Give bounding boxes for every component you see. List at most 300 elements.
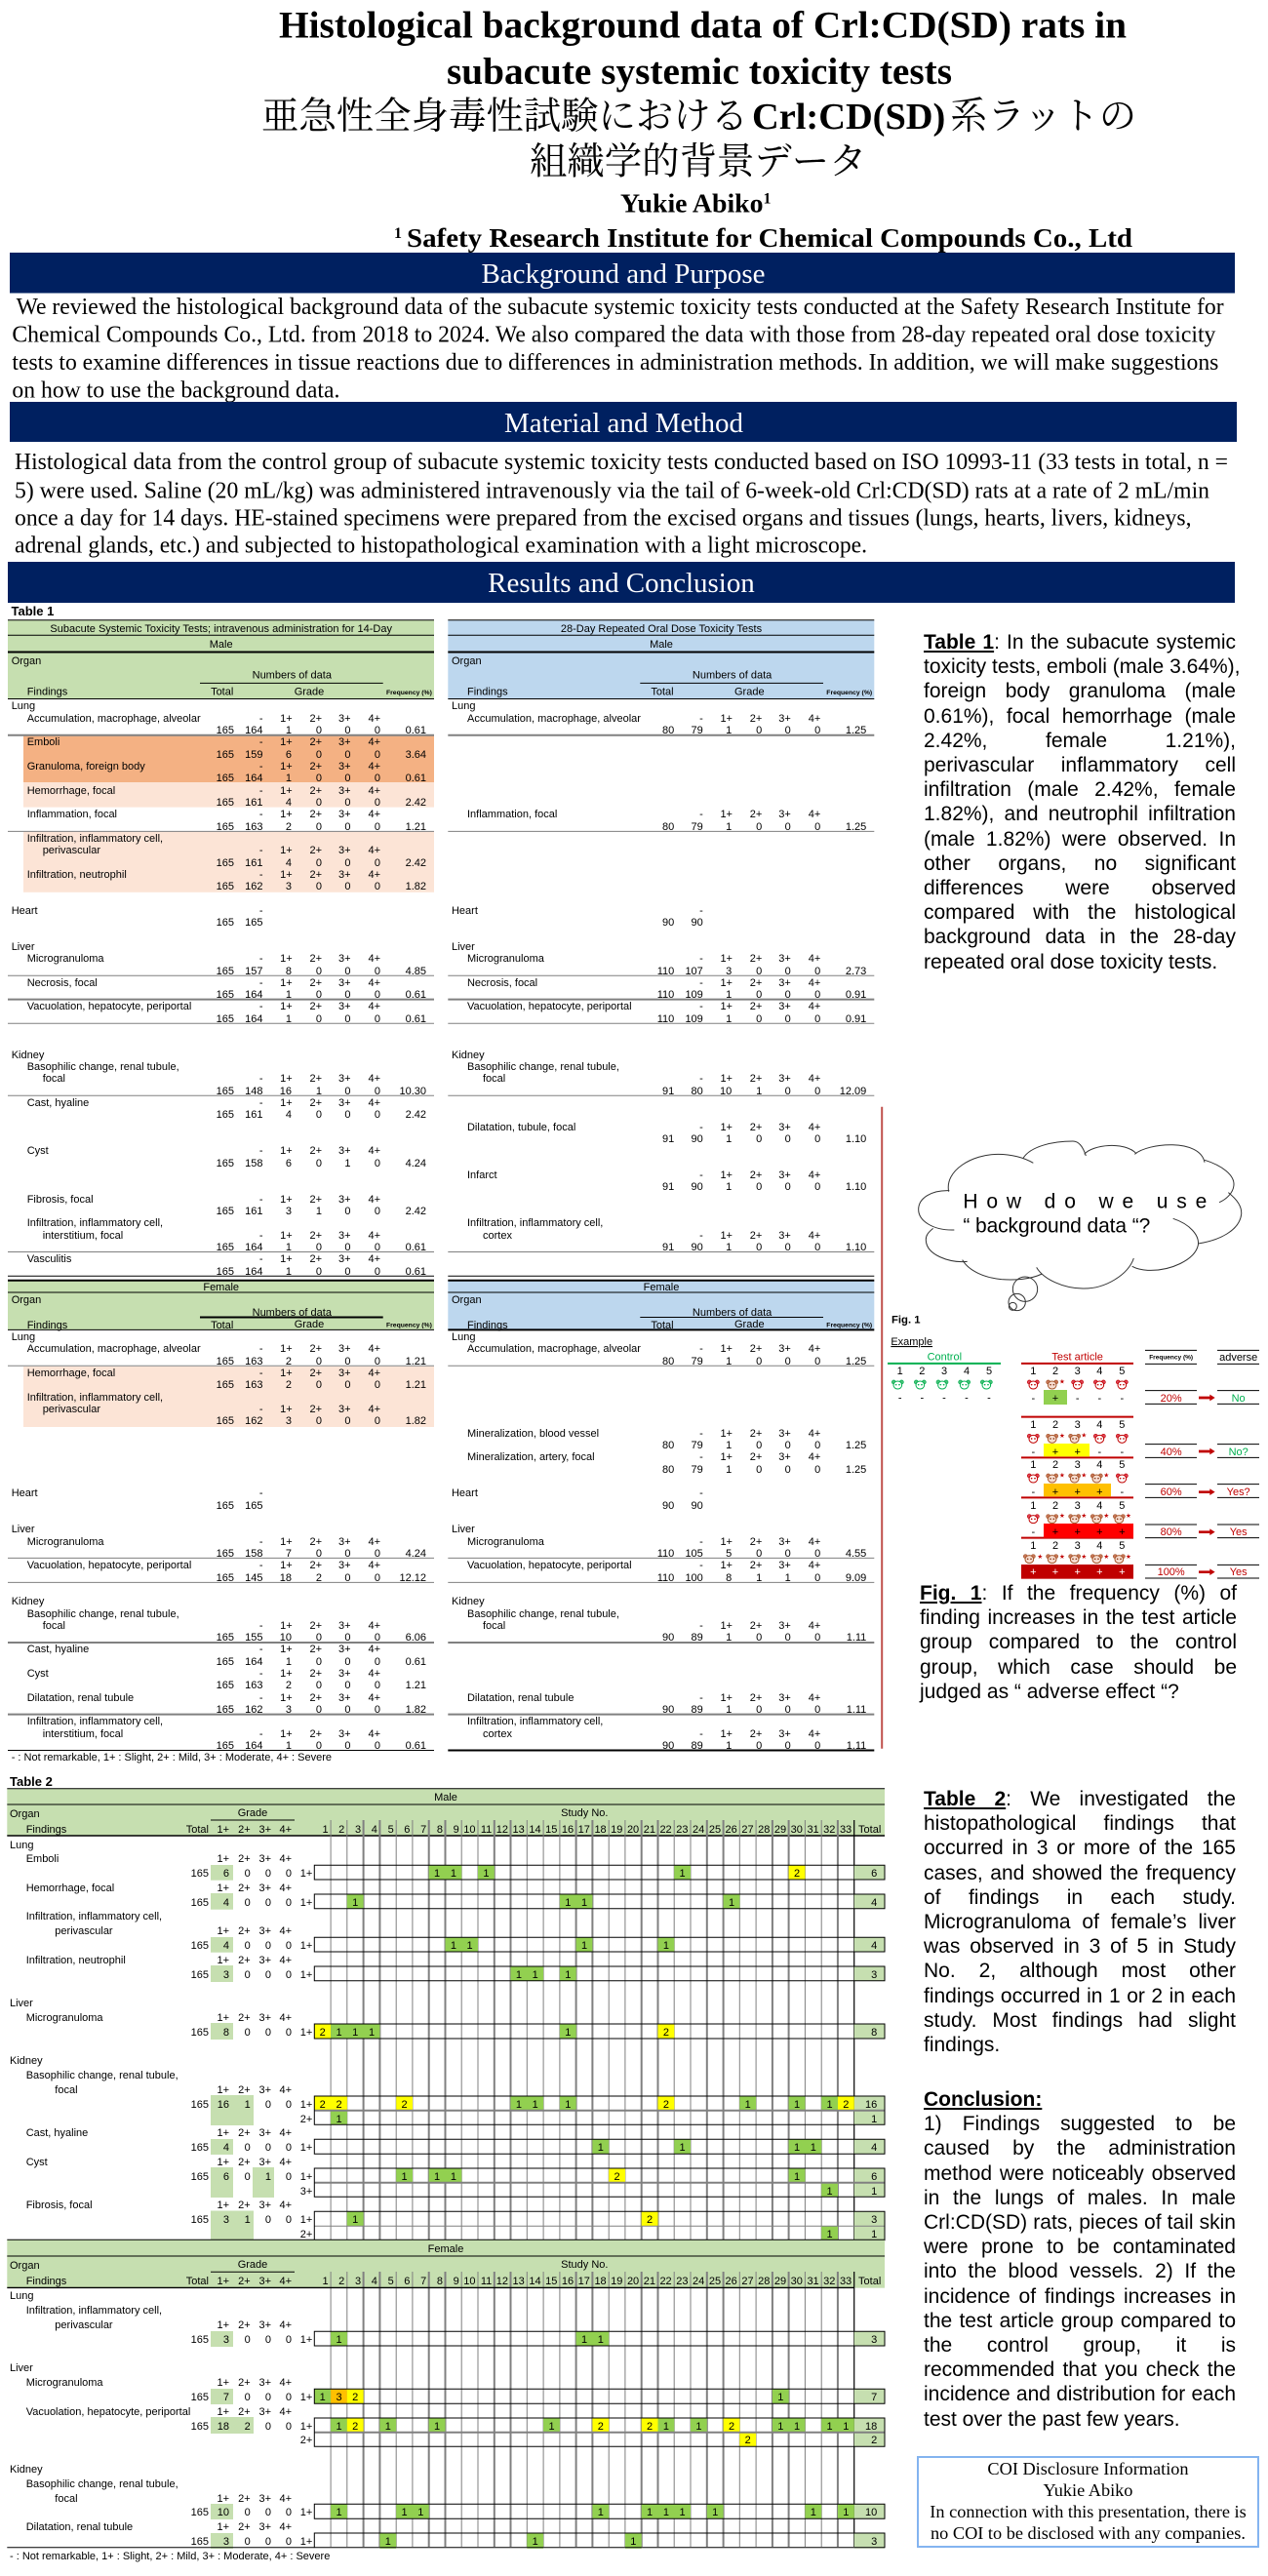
organ: liver rows: 0.61	[406, 1013, 426, 1025]
organ: kidney rows: 0	[375, 1632, 380, 1644]
title: Japanese: Crl:CD(SD)	[752, 97, 945, 138]
test article group: +	[1052, 1526, 1058, 1538]
organ: lung rows: Mineralization, blood vessel	[467, 1428, 599, 1440]
organ: kidney rows: -	[699, 1169, 703, 1181]
row: Basophilic change: 1	[336, 2114, 342, 2125]
highlight band: female lung findings	[23, 1367, 434, 1427]
header: female: 8	[437, 2276, 443, 2287]
organ: kidney rows: 4+	[368, 1097, 380, 1109]
header: female subacute	[8, 1281, 434, 1331]
test article group: 5	[1119, 1366, 1125, 1377]
organ: kidney rows: 1+	[720, 1620, 733, 1632]
organ: kidney rows: 4+	[809, 1692, 820, 1704]
label: Table 2: Table 2	[10, 1774, 53, 1789]
organ: lung rows: 0	[316, 1379, 322, 1391]
organ: kidney rows: 165	[217, 1158, 234, 1169]
header: male subacute: Organ	[12, 655, 41, 667]
organ: kidney rows	[452, 1050, 866, 1253]
row: female Basophilic change: 1	[843, 2507, 849, 2518]
organ: kidney rows: 0	[316, 1158, 322, 1169]
organ: liver rows: 0.91	[846, 989, 866, 1001]
organ: kidney rows: 4+	[809, 1728, 820, 1740]
row: Infiltration, perivascular: 1+	[217, 1925, 229, 1937]
organ: liver rows: Vacuolation, hepatocyte, periportal	[467, 1001, 632, 1012]
organ: liver rows	[12, 1524, 426, 1584]
text: method paragraph: once a day for 14 days. HE-stained specimens were prepared from the excised organs and tissues (lungs, hearts, livers, kidneys,	[15, 505, 1192, 531]
organ: kidney rows: 164	[245, 1242, 263, 1253]
row: Hemorrhage, focal: 0	[245, 1897, 251, 1909]
row: female Vacuolation: 2+	[300, 2435, 312, 2446]
organ: lung rows: 2+	[750, 1343, 762, 1355]
row: female Infiltration, perivascular	[26, 2305, 885, 2347]
header: male 28-day: Organ	[452, 655, 482, 667]
organ: kidney rows: 0	[316, 1704, 322, 1716]
organ: heart row	[452, 905, 703, 929]
row: female Basophilic change: 1	[417, 2507, 423, 2518]
organ: lung rows: 0	[375, 725, 380, 736]
organ: kidney rows: 0	[375, 1656, 380, 1668]
row: female Vacuolation: 1	[827, 2421, 833, 2433]
test article group: 4	[1096, 1366, 1102, 1377]
organ: kidney rows: 162	[245, 1704, 263, 1716]
organ: liver rows: 0	[375, 1013, 380, 1025]
header: female subacute: Frequency (%)	[386, 1323, 432, 1328]
row: Hemorrhage, focal: 1	[565, 1897, 571, 1909]
organ: kidney rows: 1	[316, 1086, 322, 1097]
organ: lung rows: 0	[375, 773, 380, 784]
organ: liver rows: Necrosis, focal	[467, 977, 537, 989]
organ: kidney rows: 1.10	[846, 1133, 866, 1145]
text: Conclusion: incidence and distribution for each	[924, 2383, 1236, 2405]
organ: liver rows: 2+	[309, 977, 322, 989]
organ: lung rows: 4+	[368, 713, 380, 725]
organ: liver rows: 0	[814, 1548, 820, 1560]
organ: liver rows: 165	[217, 966, 234, 977]
row: Microgranuloma male: 2	[663, 2027, 669, 2039]
row: Fibrosis, focal: 1+	[217, 2200, 229, 2211]
header: female: 7	[420, 2276, 426, 2287]
row: Basophilic change: 1	[565, 2099, 571, 2111]
row: Cast, hyaline: 0	[286, 2142, 292, 2154]
text: Conclusion: were prone to be contaminated	[924, 2236, 1236, 2258]
organ: lung rows: 1.25	[846, 1440, 866, 1451]
adverse column: Yes	[1230, 1526, 1248, 1538]
row: Basophilic change: 0	[265, 2099, 271, 2111]
header: female: 5	[388, 2276, 394, 2287]
header: female: 1+	[217, 2276, 229, 2287]
organ: kidney rows: 89	[692, 1632, 703, 1644]
organ: lung rows: 0.61	[406, 773, 426, 784]
row: Infiltration, neutrophil: 3+	[258, 1955, 271, 1966]
test article group: -	[1120, 1447, 1124, 1458]
row: female Microgranuloma: 0	[245, 2392, 251, 2403]
organ: lung rows: 165	[217, 821, 234, 833]
organ: liver rows: 0	[814, 1013, 820, 1025]
organ: kidney rows: focal	[483, 1073, 505, 1085]
header: male: 3+	[258, 1824, 271, 1836]
arrows	[1199, 1395, 1215, 1575]
organ: kidney rows: 1+	[720, 1230, 733, 1242]
test article group: ★	[1103, 1512, 1109, 1520]
header: male: 3	[355, 1824, 361, 1836]
text: Table 1 commentary: 0.61%), focal hemorrhage (male	[924, 705, 1236, 728]
row: Hemorrhage, focal	[26, 1882, 885, 1910]
header: male: Study No.	[561, 1807, 608, 1819]
row: Fibrosis, focal: 1+	[300, 2214, 312, 2226]
organ: liver rows: 110	[657, 1572, 674, 1584]
row: female Dilatation: 4+	[279, 2521, 292, 2533]
organ: liver rows: 0	[344, 1013, 351, 1025]
test article group: 2	[1052, 1500, 1058, 1512]
organ: liver rows: 0	[375, 1572, 380, 1584]
organ: kidney rows: 1+	[280, 1194, 293, 1206]
organ: kidney rows: 1+	[720, 1122, 733, 1133]
organ: heart row: -	[699, 905, 703, 917]
text: Table 1 commentary: 2.42%, female 1.21%),	[924, 730, 1236, 752]
row: Emboli: 3+	[258, 1853, 271, 1865]
organ: kidney rows: 1	[726, 1133, 732, 1145]
header: female 28-day: Frequency (%)	[826, 1323, 872, 1328]
header: female: 17	[578, 2276, 590, 2287]
organ: lung rows: 1+	[280, 845, 293, 856]
organ: lung rows	[452, 1331, 866, 1476]
text: Table 1 commentary	[924, 631, 1240, 973]
row: Cast, hyaline: 1+	[300, 2142, 312, 2154]
header: female subacute: Grade	[295, 1319, 324, 1330]
organ: lung rows: 0	[344, 1415, 351, 1427]
table 1 male: subacute systemic toxicity	[8, 620, 434, 1278]
organ: kidney rows: 89	[692, 1704, 703, 1716]
test article group: 4	[1096, 1540, 1102, 1552]
row: Basophilic change: 1	[871, 2114, 877, 2125]
row: female Infiltration, perivascular: 1	[581, 2334, 587, 2346]
organ: liver rows: 2+	[750, 977, 762, 989]
organ: liver rows: -	[259, 1001, 263, 1012]
organ: lung rows: 1+	[280, 713, 293, 725]
organ: liver rows: 4+	[809, 953, 820, 965]
row: female Basophilic change: 0	[245, 2507, 251, 2518]
row: female Vacuolation: 1	[336, 2421, 342, 2433]
header: male subacute: Frequency (%)	[386, 690, 432, 696]
text: Fig. 1 caption: Fig. 1: If the frequency (%) of	[920, 1582, 1237, 1605]
organ: lung rows: 2.42	[406, 797, 426, 809]
organ: kidney rows: -	[259, 1253, 263, 1265]
row: Infiltration, perivascular	[26, 1911, 885, 1953]
organ: lung rows: 0	[814, 725, 820, 736]
row: Basophilic change: 2	[843, 2099, 849, 2111]
organ: liver rows: Vacuolation, hepatocyte, periportal	[27, 1560, 191, 1571]
row: female Dilatation: 2+	[238, 2521, 251, 2533]
row: female Microgranuloma: 3	[336, 2392, 342, 2403]
organ: liver rows: 1	[756, 1572, 762, 1584]
organ: kidney rows: 4+	[368, 1620, 380, 1632]
header: male 28-day: Frequency (%)	[826, 690, 872, 696]
organ: liver rows: 0	[344, 1548, 351, 1560]
organ: lung rows: 0	[814, 1440, 820, 1451]
header: male subacute: Male	[210, 639, 233, 651]
organ: kidney rows: 0	[316, 1109, 322, 1121]
control group: -	[942, 1393, 946, 1405]
header: female subacute: Numbers of data	[253, 1307, 333, 1319]
organ: kidney rows: 158	[245, 1158, 263, 1169]
organ: liver rows: 165	[217, 989, 234, 1001]
organ: liver rows: 145	[245, 1572, 263, 1584]
row: Basophilic change: 1	[245, 2099, 251, 2111]
organ: lung rows: 1.25	[846, 821, 866, 833]
frequency column: 40%	[1161, 1447, 1182, 1458]
row: Cast, hyaline: 1	[598, 2142, 604, 2154]
test article group: ★	[1126, 1512, 1131, 1520]
row: Basophilic change: 16	[865, 2099, 877, 2111]
organ: liver rows: Liver	[12, 1524, 35, 1535]
text: Table 2 commentary: No. 2, although most other	[924, 1960, 1236, 1982]
organ: kidney rows: 1	[726, 1704, 732, 1716]
row: female Infiltration, perivascular: 1	[598, 2334, 604, 2346]
label: Table 1: Table 1	[12, 604, 54, 618]
organ: lung rows: 0	[344, 773, 351, 784]
row: female Vacuolation	[26, 2406, 885, 2446]
organ: liver rows: 1	[286, 989, 292, 1001]
test article group: 3	[1075, 1540, 1081, 1552]
text: Table 1 commentary: perivascular inflammatory cell	[924, 754, 1236, 776]
organ: liver rows	[452, 1524, 866, 1584]
organ: kidney rows: 4+	[368, 1230, 380, 1242]
organ: lung rows: Hemorrhage, focal	[27, 785, 115, 797]
organ: heart row: 165	[217, 1500, 234, 1512]
header: female: 13	[513, 2276, 525, 2287]
header: female: 6	[404, 2276, 410, 2287]
row: Fibrosis, focal: 1	[245, 2214, 251, 2226]
organ: kidney rows: Vasculitis	[27, 1253, 72, 1265]
row: Infiltration, neutrophil: 1	[516, 1969, 522, 1981]
organ: lung rows: 1	[726, 725, 732, 736]
organ: lung rows: 162	[245, 881, 263, 892]
organ: kidney rows: Infiltration, inflammatory cell,	[467, 1217, 603, 1229]
organ: kidney rows: 0.61	[406, 1656, 426, 1668]
test article group: -	[1097, 1447, 1101, 1458]
organ: lung rows: 3+	[338, 1404, 351, 1415]
row: Microgranuloma male: 3+	[258, 2012, 271, 2024]
header: male: 11	[481, 1824, 492, 1836]
text: background paragraph: We reviewed the histological background data of the subacute systemic toxicity tests conducted at the Safety Research Institute for	[17, 295, 1224, 320]
male organ headings: Liver	[10, 1998, 33, 2009]
panel: COI disclosure: Yukie Abiko	[1044, 2480, 1132, 2500]
organ: heart row: -	[259, 905, 263, 917]
organ: lung rows: -	[259, 785, 263, 797]
row: female Microgranuloma: 7	[871, 2392, 877, 2403]
organ: lung rows: 2+	[750, 1428, 762, 1440]
organ: lung rows: 165	[217, 725, 234, 736]
organ: lung rows: Accumulation, macrophage, alveolar	[467, 713, 641, 725]
row: Fibrosis, focal: 1	[352, 2214, 358, 2226]
organ: kidney rows: 0	[756, 1181, 762, 1193]
organ: kidney rows	[12, 1050, 426, 1278]
adverse column: No?	[1229, 1447, 1248, 1458]
organ: kidney rows: 1+	[720, 1169, 733, 1181]
header: female subacute: Female	[203, 1282, 239, 1293]
row: Fibrosis, focal: 0	[286, 2214, 292, 2226]
row: female Dilatation: 0	[265, 2536, 271, 2548]
organ: kidney rows: 10	[720, 1086, 732, 1097]
text: Fig. 1 caption: judged as “ adverse effect “?	[920, 1681, 1179, 1703]
header: male: 10	[463, 1824, 476, 1836]
test article group: +	[1074, 1566, 1081, 1578]
organ: liver rows: 4+	[368, 1536, 380, 1548]
test article group: -	[1097, 1393, 1101, 1405]
title: English: Histological background data of Crl:CD(SD) rats in	[279, 4, 1127, 47]
row: Infiltration, perivascular: 2+	[238, 1925, 251, 1937]
header: female: 14	[529, 2276, 541, 2287]
organ: liver rows: 165	[217, 1548, 234, 1560]
organ: lung rows: 0	[785, 1464, 791, 1476]
row: Cast, hyaline: 4	[871, 2142, 877, 2154]
header: male subacute: Subacute Systemic Toxicity Tests; intravenous administration for 14-Day	[50, 623, 392, 635]
header: male subacute: Numbers of data	[253, 669, 333, 681]
row: female Infiltration, perivascular: 0	[245, 2334, 251, 2346]
organ: heart row: Heart	[12, 1487, 38, 1499]
row: female Basophilic change: 0	[286, 2507, 292, 2518]
row: Basophilic change: 4+	[279, 2084, 292, 2096]
organ: kidney rows: 2+	[309, 1145, 322, 1157]
header: female: 19	[611, 2276, 622, 2287]
text: Table 1 commentary: foreign body granuloma (male	[924, 680, 1236, 702]
organ: kidney rows: 165	[217, 1680, 234, 1691]
test article group: Test article	[1051, 1352, 1103, 1364]
row: Basophilic change: 2	[320, 2099, 326, 2111]
organ: kidney rows: 10	[280, 1632, 292, 1644]
organ: kidney rows: 0	[375, 1086, 380, 1097]
test article group: ★	[1081, 1431, 1087, 1439]
organ: kidney rows: -	[699, 1122, 703, 1133]
organ: liver rows: -	[699, 1001, 703, 1012]
organ: kidney rows: 2+	[309, 1230, 322, 1242]
row: Cyst: 2	[614, 2171, 620, 2183]
row: Cast, hyaline: 2+	[238, 2127, 251, 2139]
row: Fibrosis, focal: Fibrosis, focal	[26, 2200, 93, 2211]
row: female Dilatation: 0	[286, 2536, 292, 2548]
organ: liver rows: 165	[217, 1013, 234, 1025]
text: Table 1 commentary: differences were observed	[924, 877, 1236, 899]
organ: liver rows: 158	[245, 1548, 263, 1560]
text: Table 2 commentary: occurred in 3 or more of the 165	[924, 1837, 1236, 1859]
organ: kidney rows: 0	[814, 1740, 820, 1752]
row: Fibrosis, focal: 3	[223, 2214, 229, 2226]
organ: liver rows: 3+	[338, 1001, 351, 1012]
title: English: subacute systemic toxicity tests	[447, 51, 952, 93]
footnote: table 2 grades: - : Not remarkable, 1+ : Slight, 2+ : Mild, 3+ : Moderate, 4+ : Severe	[10, 2551, 330, 2562]
row: Basophilic change: 1	[794, 2099, 800, 2111]
test article group: +	[1096, 1526, 1103, 1538]
test article group: ★	[1059, 1432, 1065, 1440]
organ: lung rows: 1.21	[406, 821, 426, 833]
organ: lung rows: 4+	[368, 809, 380, 820]
organ: kidney rows: 1.10	[846, 1181, 866, 1193]
organ: liver rows: Vacuolation, hepatocyte, periportal	[467, 1560, 632, 1571]
row: female Dilatation: 165	[191, 2536, 209, 2548]
header: female: Study No.	[561, 2259, 608, 2271]
header: female: 10	[463, 2276, 476, 2287]
row: female Microgranuloma: 165	[191, 2392, 209, 2403]
organ: kidney rows: 4+	[368, 1073, 380, 1085]
heading: Material and Method: Material and Method	[504, 408, 744, 439]
row: Hemorrhage, focal: 165	[191, 1897, 209, 1909]
organ: kidney rows: 1+	[280, 1230, 293, 1242]
organ: lung rows: 0	[375, 881, 380, 892]
organ: kidney rows: 4	[286, 1109, 292, 1121]
organ: lung rows: 3+	[338, 736, 351, 748]
organ: lung rows: -	[699, 809, 703, 820]
organ: liver rows: 2	[316, 1572, 322, 1584]
row: Hemorrhage, focal: Hemorrhage, focal	[26, 1882, 114, 1894]
row: Cast, hyaline: 4+	[279, 2127, 292, 2139]
header: female: 18	[594, 2276, 607, 2287]
row: Microgranuloma male: 0	[265, 2027, 271, 2039]
row: female Vacuolation: 1	[434, 2421, 440, 2433]
header: male: 9	[454, 1824, 459, 1836]
test article group: 4	[1096, 1459, 1102, 1471]
test article group: 1	[1030, 1459, 1036, 1471]
organ: lung rows: 0	[344, 797, 351, 809]
organ: lung rows: 80	[662, 821, 674, 833]
header: male: 1	[322, 1824, 329, 1836]
organ: kidney rows: 2+	[750, 1073, 762, 1085]
row: Infiltration, neutrophil: 0	[265, 1969, 271, 1981]
organ: liver rows: 1+	[280, 1560, 293, 1571]
male organ headings: Kidney	[10, 2055, 43, 2067]
organ: kidney rows: 4+	[809, 1169, 820, 1181]
organ: kidney rows: 89	[692, 1740, 703, 1752]
test article group: 5	[1119, 1500, 1125, 1512]
row: Hemorrhage, focal: 4	[871, 1897, 877, 1909]
row: Fibrosis, focal: 1	[871, 2229, 877, 2240]
row: Basophilic change: 2+	[238, 2084, 251, 2096]
organ: lung rows: -	[259, 809, 263, 820]
organ: liver rows	[452, 941, 866, 1025]
organ: lung rows: -	[259, 845, 263, 856]
organ: lung rows: 4+	[368, 736, 380, 748]
organ: kidney rows: 90	[692, 1181, 703, 1193]
cloud outline	[919, 1141, 1242, 1311]
test article group: +	[1119, 1526, 1126, 1538]
organ: kidney rows: 0	[785, 1740, 791, 1752]
organ: liver rows: 100	[685, 1572, 703, 1584]
header: male: 13	[513, 1824, 525, 1836]
row: Fibrosis, focal: 3	[871, 2214, 877, 2226]
organ: liver rows: 4+	[809, 1001, 820, 1012]
header: female: 22	[659, 2276, 672, 2287]
text: Table 2 commentary: Table 2: We investigated the	[924, 1788, 1236, 1810]
row: Infiltration, neutrophil: 1+	[217, 1955, 229, 1966]
row: Infiltration, neutrophil: 1	[533, 1969, 538, 1981]
row: Cyst: 6	[871, 2171, 877, 2183]
organ: liver rows: Vacuolation, hepatocyte, periportal	[27, 1001, 191, 1012]
organ: lung rows: 4+	[368, 869, 380, 881]
row: female Microgranuloma	[26, 2377, 885, 2404]
organ: kidney rows: 161	[245, 1206, 263, 1217]
organ: kidney rows: 91	[662, 1242, 674, 1253]
organ: lung rows: 3+	[778, 713, 791, 725]
row: female Vacuolation: 1	[385, 2421, 391, 2433]
row: female Dilatation: Dilatation, renal tubule	[26, 2521, 133, 2533]
organ: heart row: 165	[245, 1500, 263, 1512]
organ: liver rows: 12.12	[399, 1572, 426, 1584]
organ: kidney rows: 10.30	[399, 1086, 426, 1097]
organ: lung rows: 161	[245, 797, 263, 809]
organ: liver rows	[12, 941, 426, 1025]
organ: kidney rows: 0	[344, 1632, 351, 1644]
header: male: 25	[709, 1824, 721, 1836]
organ: liver rows: 3+	[778, 953, 791, 965]
